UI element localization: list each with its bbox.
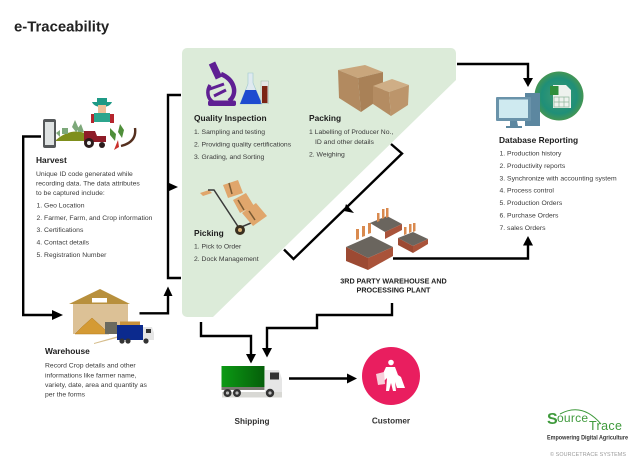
text: harvest: to be captured include: (36, 190, 105, 197)
arrow: panel to shipping (201, 322, 256, 364)
panel: green process area (182, 48, 456, 317)
text: harvest: 3. Certifications (36, 227, 84, 234)
text: database reporting: 1. Production history (500, 150, 562, 158)
arrow: bracket into panel (168, 95, 181, 278)
text: harvest: recording data. The data attributes (36, 180, 140, 188)
text: warehouse (45, 346, 147, 398)
icon: excel circle (534, 72, 584, 120)
text: warehouse: Record Crop details and other (45, 362, 136, 370)
logo: SourceTrace: © SOURCETRACE SYSTEMS (550, 451, 626, 458)
text: harvest: 2. Farmer, Farm, and Crop information (36, 215, 153, 222)
logo: SourceTrace (547, 410, 628, 458)
text: plant label: PROCESSING PLANT (357, 286, 431, 294)
text: quality inspection: 3. Grading, and Sorting (194, 154, 264, 161)
logo: SourceTrace: S (547, 411, 558, 428)
text: warehouse: per the forms (45, 392, 86, 398)
icon: computer (496, 93, 540, 128)
arrow: plant to database (393, 236, 533, 258)
text: harvest: Unique ID code generated while (36, 171, 133, 178)
text: packing (309, 113, 393, 158)
text: database reporting: Database Reporting (499, 135, 578, 145)
icon: lab flask (240, 73, 268, 104)
text: quality inspection (194, 113, 292, 161)
arrow: harvest to warehouse (23, 136, 63, 320)
icon: warehouse (69, 289, 154, 344)
text: database reporting: 7. sales Orders (500, 225, 546, 232)
text: packing: ID and other details (315, 139, 375, 146)
text: picking: Picking (194, 228, 224, 238)
text: harvest (36, 155, 153, 259)
icon: factory (346, 208, 428, 270)
text: database reporting: 2. Productivity reports (500, 163, 566, 170)
text: packing: 1 Labelling of Producer No., (309, 129, 393, 136)
text: database reporting: 4. Process control (500, 188, 554, 195)
text: picking: 1. Pick to Order (194, 244, 242, 250)
arrow: shipping to customer (289, 374, 357, 384)
text: warehouse: Warehouse (45, 346, 90, 356)
text: customer: Customer (372, 416, 411, 426)
arrow: panel to database (457, 64, 533, 87)
icon: cardboard boxes (338, 65, 409, 116)
text: database reporting: 6. Purchase Orders (500, 212, 559, 220)
icon: hand truck (200, 180, 267, 235)
text: quality inspection: 2. Providing quality certifications (194, 142, 292, 148)
icon: microscope (207, 63, 236, 106)
text: database reporting: 5. Production Orders (500, 200, 563, 207)
text: database reporting: 3. Synchronize with accounting system (500, 175, 617, 182)
text: shipping: Shipping (234, 417, 270, 426)
logo: SourceTrace: ource (557, 411, 588, 425)
text: plant label (340, 276, 447, 294)
title: e-Traceability (14, 20, 110, 36)
icon: shipping truck (222, 366, 282, 398)
text: packing: 2. Weighing (309, 152, 345, 158)
text: packing: Packing (309, 113, 341, 123)
text: harvest: 4. Contact details (36, 240, 90, 246)
arrow: plant to shipping (262, 303, 392, 358)
text: warehouse: informations like farmer name, (45, 372, 137, 379)
text: plant label: 3RD PARTY WAREHOUSE AND (340, 276, 447, 286)
icon: harvest (43, 98, 135, 150)
text: picking: 2. Dock Management (194, 256, 259, 263)
text: quality inspection: 1. Sampling and testing (194, 129, 265, 136)
logo: SourceTrace: Trace (589, 419, 622, 433)
text: harvest: 5. Registration Number (36, 252, 107, 259)
text: picking (194, 228, 259, 263)
arrow: packing to warehouse plant (284, 144, 402, 259)
text: warehouse: variety, date, area and quantity as (45, 382, 147, 389)
text: harvest: 1. Geo Location (36, 202, 85, 210)
text: quality inspection: Quality Inspection (194, 113, 267, 123)
text: harvest: Harvest (36, 155, 67, 165)
icon: customer circle (362, 347, 420, 405)
text: database reporting (499, 135, 617, 232)
arrow: warehouse to panel (140, 286, 172, 313)
